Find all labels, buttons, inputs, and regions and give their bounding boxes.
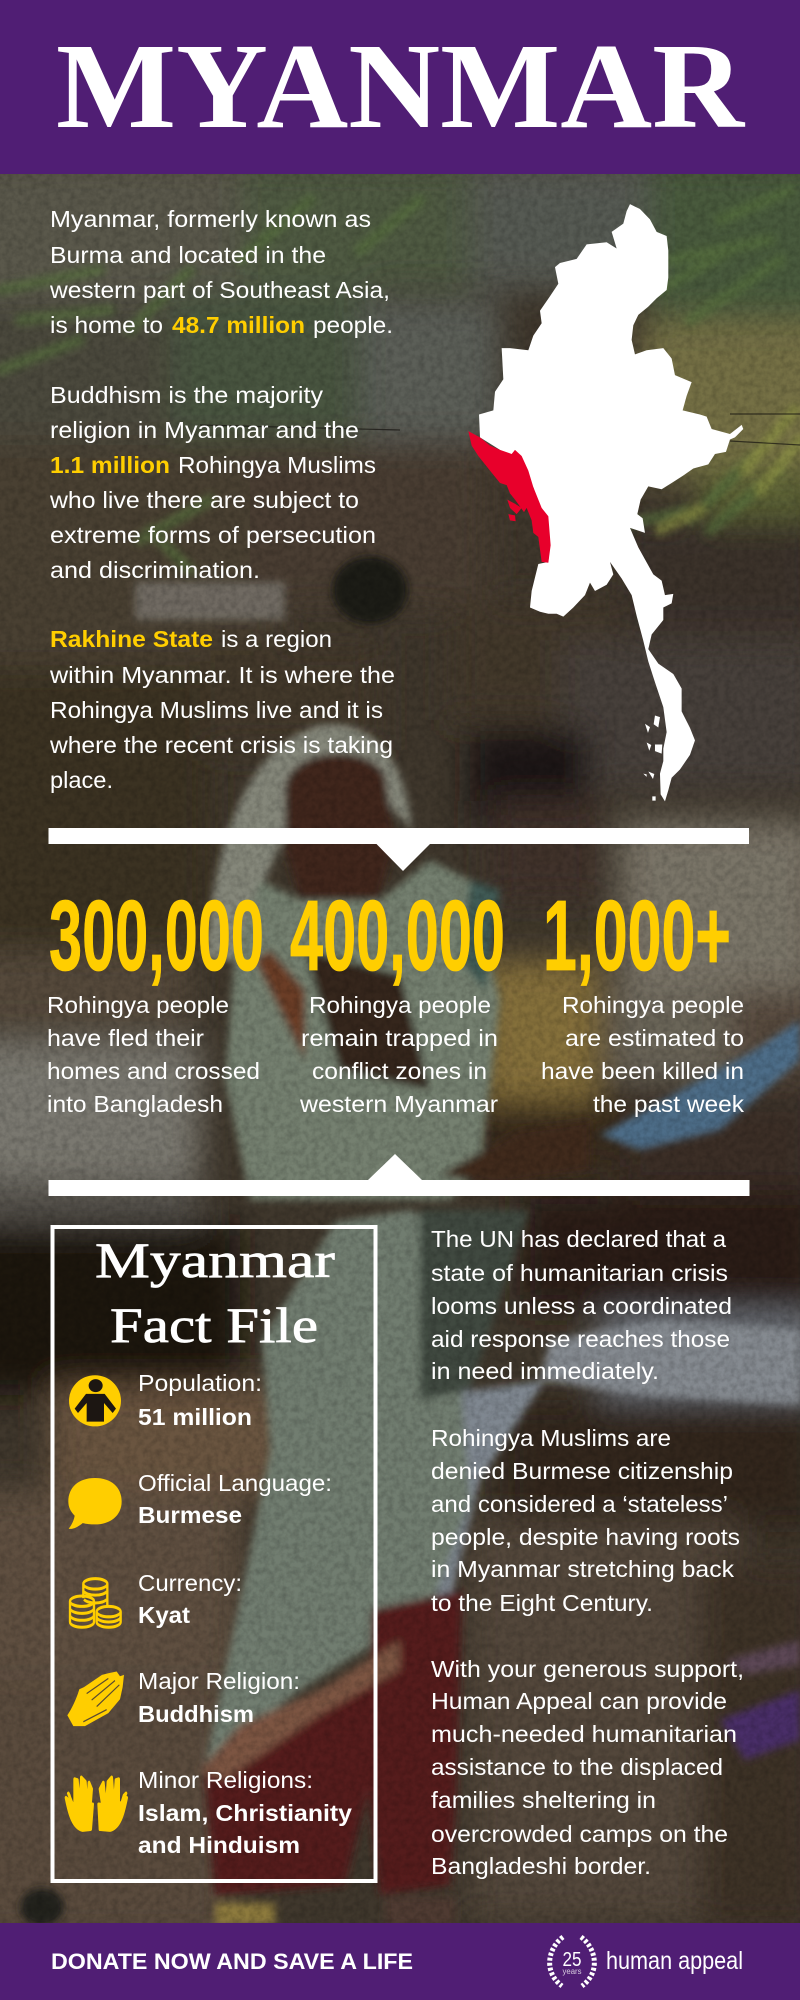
currency fact: Kyat	[138, 1602, 190, 1628]
divider bar with upward notch	[48, 1154, 750, 1196]
intro paragraph: religion and Rohingya: and discrimination.	[50, 557, 260, 583]
top band	[0, 160, 240, 310]
minor religions fact: and Hinduism	[138, 1832, 300, 1858]
major religion fact: Major Religion:	[138, 1668, 300, 1694]
child's hand and arm	[440, 1120, 590, 1185]
logo: human appeal 25 years: human appeal	[606, 1947, 743, 1975]
headscarf and face	[205, 724, 412, 960]
feet and rocks	[20, 1888, 64, 1926]
fact file heading	[95, 1232, 335, 1353]
divider bar with downward notch	[48, 828, 749, 871]
statistic: 300,000: have fled their	[47, 1025, 204, 1051]
statistic: 1,000+: are estimated to	[565, 1025, 744, 1051]
right text: humanitarian crisis: The UN has declared that a	[431, 1226, 726, 1252]
hole in burlap	[332, 556, 408, 624]
right text: humanitarian crisis: looms unless a coordinated	[431, 1293, 732, 1319]
donate call to action: DONATE NOW AND SAVE A LIFE	[51, 1949, 413, 1974]
statistic: 400,000: 400,000	[290, 880, 505, 992]
currency fact: Currency:	[138, 1570, 242, 1596]
statistic: 300,000: homes and crossed	[47, 1058, 260, 1084]
language fact: Official Language:	[138, 1470, 332, 1496]
minor religions fact: Minor Religions:	[138, 1767, 313, 1793]
panel: fact file	[52, 1227, 376, 1881]
right text: stateless people: people, despite having roots	[431, 1524, 740, 1550]
statistic: 400,000	[290, 880, 505, 1117]
right text: appeal for support: overcrowded camps on the	[431, 1821, 728, 1847]
intro paragraph: Rakhine State: place.	[50, 767, 113, 793]
title: MYANMAR	[56, 19, 746, 154]
right text: stateless people: in Myanmar stretching back	[431, 1556, 735, 1582]
population fact: 51 million	[138, 1404, 252, 1430]
major religion fact: Buddhism	[138, 1701, 254, 1727]
intro paragraph: location and population: western part of Southeast Asia,	[49, 277, 390, 303]
statistic: 400,000: western Myanmar	[299, 1091, 498, 1117]
statistic: 300,000: Rohingya people	[47, 992, 229, 1018]
intro paragraph: religion and Rohingya: Buddhism is the majority	[50, 382, 324, 408]
right text: stateless people: denied Burmese citizenship	[431, 1458, 733, 1484]
right text: appeal for support: Human Appeal can provide	[431, 1688, 727, 1714]
statistic: 300,000	[47, 880, 264, 1117]
statistic: 1,000+: the past week	[593, 1091, 745, 1117]
statistic: 1,000+: have been killed in	[541, 1058, 744, 1084]
intro paragraph: Rakhine State: is a region	[221, 626, 332, 652]
logo: human appeal 25 years	[550, 1937, 743, 1986]
lower cloak	[205, 1210, 470, 1765]
intro paragraph: Rakhine State: where the recent crisis is taking	[49, 732, 393, 758]
population fact: Population:	[138, 1370, 262, 1396]
Rakhine State in red	[468, 431, 551, 563]
right text: humanitarian crisis	[431, 1226, 732, 1384]
minor religions fact: Islam, Christianity	[138, 1800, 352, 1826]
right text: appeal for support: Bangladeshi border.	[431, 1853, 651, 1879]
right text: humanitarian crisis: aid response reaches those	[431, 1326, 730, 1352]
icon: open hands	[66, 1777, 127, 1830]
intro paragraph: religion and Rohingya	[49, 382, 376, 583]
icon: coins	[70, 1579, 121, 1627]
icon: speech bubble	[68, 1478, 122, 1529]
white southern islands	[643, 715, 662, 801]
currency fact	[138, 1570, 242, 1628]
statistic: 400,000: conflict zones in	[312, 1058, 487, 1084]
population fact	[138, 1370, 262, 1430]
statistic: 1,000+	[541, 880, 745, 1117]
right text: stateless people: Rohingya Muslims are	[431, 1425, 671, 1451]
intro paragraph: location and population: Myanmar, formerly known as	[50, 206, 371, 232]
statistic: 300,000: into Bangladesh	[47, 1091, 223, 1117]
statistic: 400,000: Rohingya people	[309, 992, 491, 1018]
header band	[0, 0, 800, 174]
intro paragraph: religion and Rohingya: Rohingya Muslims	[178, 452, 376, 478]
major religion fact	[138, 1668, 300, 1727]
intro paragraph: location and population: Burma and located in the	[50, 242, 326, 268]
red trousers	[205, 1590, 462, 1895]
tarp and white fabric	[600, 1020, 800, 1150]
statistic: 400,000: remain trapped in	[301, 1025, 498, 1051]
fact file heading: Myanmar	[95, 1232, 335, 1288]
footer band	[0, 1923, 800, 2000]
left middle	[0, 950, 190, 1030]
right text: appeal for support: families sheltering in	[431, 1787, 656, 1813]
intro paragraph: Rakhine State	[49, 626, 395, 793]
map of Myanmar with Rakhine State highlighted	[468, 204, 743, 801]
intro paragraph: location and population: is home to	[50, 312, 163, 338]
intro paragraph: religion and Rohingya: extreme forms of persecution	[50, 522, 376, 548]
right text: stateless people: and considered a ‘stateless’	[431, 1491, 728, 1517]
right text: stateless people: to the Eight Century.	[431, 1590, 653, 1616]
laurel wreath	[550, 1937, 594, 1986]
statistic: 300,000: 300,000	[49, 880, 264, 992]
logo: human appeal 25 years: 25	[562, 1949, 582, 1971]
woman's dress	[225, 860, 500, 1200]
intro paragraph: Rakhine State: within Myanmar. It is where the	[49, 662, 395, 688]
right text: humanitarian crisis: state of humanitarian crisis	[431, 1260, 728, 1286]
right text: appeal for support: much-needed humanitarian	[431, 1721, 737, 1747]
logo: human appeal 25 years: years	[562, 1967, 582, 1976]
intro paragraph: religion and Rohingya: 1.1 million	[50, 452, 170, 478]
leaf sprigs	[0, 190, 800, 570]
language fact	[138, 1470, 332, 1528]
intro paragraph: Rakhine State: Rakhine State	[50, 626, 213, 652]
right text: appeal for support: With your generous support,	[431, 1656, 744, 1682]
intro paragraph: Rakhine State: Rohingya Muslims live and it is	[50, 697, 383, 723]
minor religions fact	[138, 1767, 352, 1858]
intro paragraph: location and population: people.	[313, 312, 393, 338]
fact file heading: Fact File	[110, 1297, 318, 1353]
icon: person	[69, 1375, 121, 1426]
lower left dark	[0, 1225, 240, 1395]
upper lower right	[520, 1190, 800, 1310]
child	[490, 800, 600, 900]
intro paragraph: location and population: 48.7 million	[172, 312, 305, 338]
statistic: 1,000+: Rohingya people	[562, 992, 744, 1018]
upper right sacks	[620, 820, 800, 990]
right text: appeal for support	[431, 1656, 744, 1879]
right text: stateless people	[431, 1425, 740, 1616]
language fact: Burmese	[138, 1502, 242, 1528]
intro paragraph: religion and Rohingya: religion in Myanmar and the	[50, 417, 359, 443]
icon: praying hands	[67, 1671, 124, 1726]
intro paragraph: location and population	[49, 206, 393, 338]
right text: appeal for support: assistance to the displaced	[431, 1754, 723, 1780]
right text: humanitarian crisis: in need immediately.	[431, 1358, 659, 1384]
intro paragraph: religion and Rohingya: who live there are subject to	[49, 487, 359, 513]
